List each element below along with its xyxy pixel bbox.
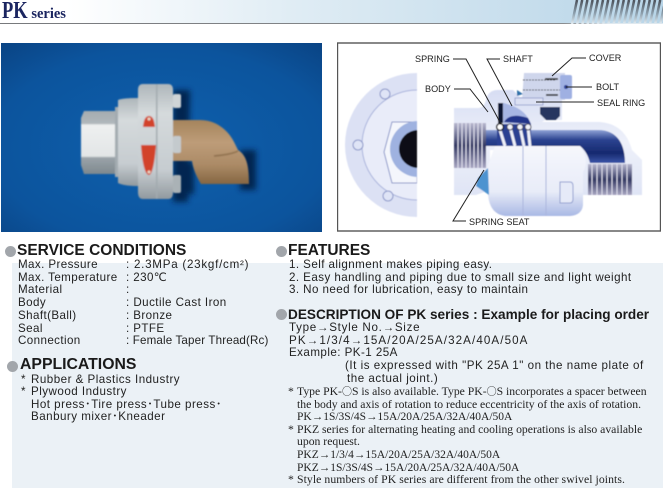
footnotes: PKZ series for alternating heating and cooling operations is also available bbox=[297, 423, 642, 436]
heading: description: DESCRIPTION OF PK series : Example for placing order bbox=[288, 307, 649, 322]
diagram labels: COVER bbox=[589, 53, 622, 63]
features list: 1. Self alignment makes piping easy. bbox=[289, 258, 492, 271]
name plate note: (It is expressed with "PK 25A 1" on the name plate of bbox=[345, 359, 644, 372]
ordering example: Type→Style No.→Size bbox=[289, 321, 420, 334]
panel: description of PK series bbox=[276, 307, 649, 486]
applications list: * bbox=[21, 385, 26, 398]
specification labels: Connection bbox=[18, 334, 81, 347]
applications list bbox=[21, 372, 26, 398]
specification labels bbox=[18, 258, 118, 347]
specification labels: Material bbox=[18, 283, 62, 296]
diagram labels: BODY bbox=[425, 84, 451, 94]
pipe elbow bbox=[486, 130, 625, 163]
panel: applications: Rubber & Plastics Industry bbox=[31, 372, 180, 386]
ordering example: Example: PK-1 25A bbox=[289, 346, 398, 359]
hex end bbox=[81, 111, 116, 174]
specification labels: Body bbox=[18, 296, 46, 309]
diagram labels bbox=[415, 53, 645, 227]
panel: features bbox=[276, 242, 631, 296]
footnotes: Style numbers of PK series are different from the other swivel joints. bbox=[297, 473, 625, 486]
footnotes: PK→1S/3S/4S→15A/20A/25A/32A/40A/50A bbox=[297, 411, 512, 423]
footnotes: PKZ→1S/3S/4S→15A/20A/25A/32A/40A/50A bbox=[297, 462, 519, 474]
heading: features: FEATURES bbox=[288, 242, 370, 259]
threaded inlet bbox=[454, 123, 486, 168]
title: PK series bbox=[2, 0, 66, 24]
springs bbox=[499, 127, 530, 146]
diagram labels: SPRING SEAT bbox=[469, 217, 530, 227]
footnotes: * bbox=[288, 423, 294, 436]
footnotes: * bbox=[288, 473, 294, 486]
features list: 2. Easy handling and piping due to small size and light weight bbox=[289, 271, 631, 284]
panel: applications: Hot press･Tire press･Tube press･ bbox=[31, 398, 222, 411]
leader lines bbox=[453, 58, 594, 221]
diagram labels: SEAL RING bbox=[597, 98, 645, 108]
specification labels: Max. Temperature bbox=[18, 271, 118, 284]
specification labels: Max. Pressure bbox=[18, 258, 98, 271]
specification labels: Seal bbox=[18, 322, 43, 335]
shadow bbox=[173, 90, 256, 202]
applications list: * bbox=[21, 372, 26, 386]
blue wedge bbox=[476, 168, 489, 195]
footnotes: Type PK-○S is also available. Type PK-○S incorporates a spacer between bbox=[297, 383, 647, 398]
features list bbox=[289, 258, 631, 296]
lower body shell bbox=[487, 146, 586, 216]
panel: applications: Plywood Industry bbox=[31, 385, 127, 398]
name plate note: the actual joint.) bbox=[347, 372, 438, 385]
specification values: : PTFE bbox=[126, 322, 164, 335]
lower bolt bbox=[560, 182, 573, 203]
diagram labels: BOLT bbox=[596, 82, 620, 92]
specification values: : 230℃ bbox=[126, 271, 167, 284]
outlet thread bbox=[588, 164, 632, 195]
footnotes: the body and axis of rotation to reduce eccentricity of the axis of rotation. bbox=[297, 398, 641, 411]
footnotes: upon request. bbox=[297, 435, 360, 448]
ordering example bbox=[289, 321, 529, 359]
icon: diagonal stripes in header bbox=[570, 0, 663, 24]
icon: grey bullet bbox=[5, 246, 16, 257]
icon: grey bullet bbox=[7, 361, 18, 372]
specification values: : Bronze bbox=[126, 309, 172, 322]
title: PK series: series bbox=[31, 6, 66, 22]
neck bbox=[118, 98, 138, 186]
photo: PK swivel joint on blue background bbox=[1, 43, 322, 232]
spring chamber bbox=[498, 103, 531, 124]
diagram: cutaway cross-section bbox=[337, 42, 661, 232]
cutaway body bbox=[454, 90, 642, 195]
diagram labels: SHAFT bbox=[503, 54, 533, 64]
footnotes: * bbox=[288, 385, 294, 398]
diagram labels: SPRING bbox=[415, 54, 450, 64]
header band bbox=[0, 0, 663, 24]
end view of flange bbox=[344, 72, 418, 218]
footnotes bbox=[288, 383, 647, 486]
bolts bbox=[173, 94, 181, 108]
specification values: : Female Taper Thread(Rc) bbox=[126, 334, 269, 347]
specification values: : 2.3MPa (23kgf/cm²) bbox=[126, 258, 249, 271]
heading: service conditions: SERVICE CONDITIONS bbox=[17, 242, 186, 259]
panel: service conditions bbox=[5, 242, 269, 347]
name plate note bbox=[345, 359, 644, 385]
features list: 3. No need for lubrication, easy to maintain bbox=[289, 283, 528, 296]
panel: applications bbox=[7, 356, 222, 423]
specification values bbox=[126, 258, 269, 347]
specification values: : Ductile Cast Iron bbox=[126, 296, 227, 309]
cover and bolt bbox=[522, 73, 565, 100]
red name plate bbox=[143, 116, 155, 127]
flange bbox=[138, 84, 173, 199]
footnotes: PKZ→1/3/4→15A/20A/25A/32A/40A/50A bbox=[297, 449, 500, 461]
header rule bbox=[0, 23, 663, 24]
icon: grey bullet bbox=[276, 309, 287, 320]
specification labels: Shaft(Ball) bbox=[18, 309, 77, 322]
ordering example: PK→1/3/4→15A/20A/25A/32A/40A/50A bbox=[289, 334, 529, 347]
panel: applications: Banbury mixer･Kneader bbox=[31, 410, 165, 423]
heading: applications: APPLICATIONS bbox=[20, 356, 136, 373]
specification values: : bbox=[126, 283, 130, 296]
bronze elbow bbox=[172, 120, 249, 184]
panel: pale text background bbox=[12, 263, 663, 488]
icon: grey bullet bbox=[276, 246, 287, 257]
